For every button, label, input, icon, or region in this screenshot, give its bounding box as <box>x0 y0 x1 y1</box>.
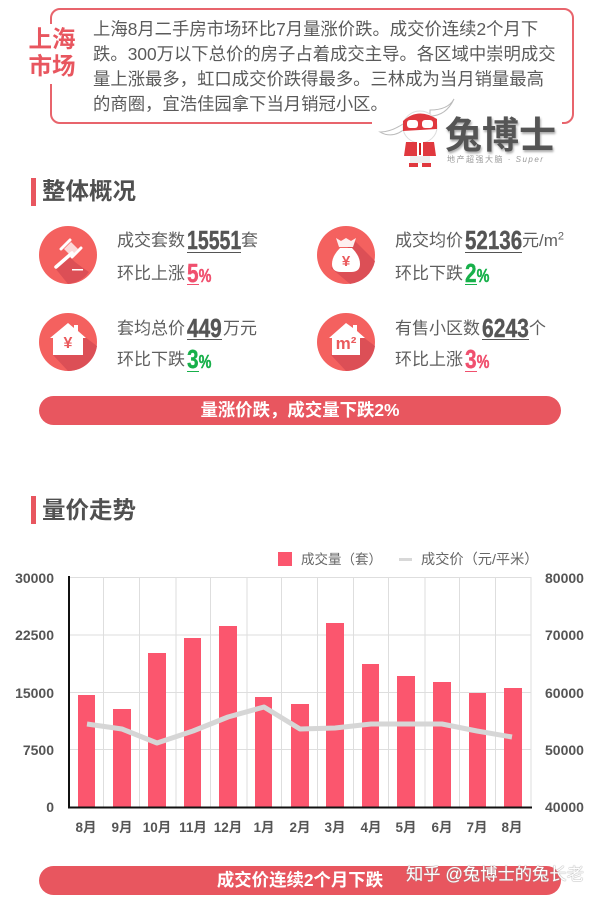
right axis labels: 40000 <box>545 799 584 815</box>
chart: volume bars and price line <box>15 551 584 835</box>
summary text: 量上涨最多，虹口成交价跌得最多。三林成为当月销量最高 <box>93 69 544 89</box>
icon: house with yen: ¥ <box>64 335 73 352</box>
stat: communities on sale: 3% <box>465 344 489 374</box>
month labels: 11月 <box>179 820 207 835</box>
change text: 环比下跌 <box>117 350 185 369</box>
logo wordmark: 兔博士 <box>445 115 556 156</box>
market heading: 上海 <box>28 26 76 52</box>
stat: deal count: 5% <box>187 258 211 288</box>
stat: average price: 2% <box>465 258 489 288</box>
heading text: 整体概况 <box>42 178 136 204</box>
change text: 环比上涨 <box>395 350 463 369</box>
right axis labels <box>545 570 584 815</box>
axes <box>69 576 532 808</box>
stat: average price <box>317 225 564 288</box>
stat underline <box>482 339 529 340</box>
summary text: 上海8月二手房市场环比7月量涨价跌。成交价连续2个月下 <box>93 19 538 39</box>
month labels: 3月 <box>324 820 346 835</box>
logo tagline: 地产超强大脑 · Super <box>447 155 544 164</box>
change text <box>117 344 212 374</box>
logo: rabbit doctor <box>372 98 562 167</box>
frame outline <box>50 8 574 124</box>
left axis labels: 22500 <box>15 627 54 643</box>
icon: gavel <box>39 226 97 284</box>
stat: communities on sale: 个 <box>529 319 546 338</box>
stat: average price: 元/m2 <box>522 230 564 250</box>
month labels: 2月 <box>289 820 311 835</box>
summary text <box>93 19 556 114</box>
stat: average price: 52136 <box>465 225 522 255</box>
icon: rabbit mascot <box>378 98 454 167</box>
bars: monthly volume <box>78 623 522 807</box>
stat: average total price: 449 <box>187 313 222 343</box>
legend label: volume: 成交量（套） <box>301 551 382 567</box>
change text: 环比下跌 <box>395 264 463 283</box>
icon: house with square metres: m² <box>336 334 357 353</box>
legend <box>278 551 538 568</box>
market heading: 市场 <box>28 53 76 79</box>
stat: communities on sale: 6243 <box>482 313 529 343</box>
stat text <box>117 225 258 255</box>
right axis labels: 80000 <box>545 570 584 586</box>
legend swatch: volume <box>278 552 292 566</box>
left axis labels: 15000 <box>15 685 54 701</box>
stat underline <box>187 339 222 340</box>
legend label: price: 成交价（元/平米） <box>421 551 538 568</box>
heading accent bar <box>31 496 36 524</box>
month labels: 9月 <box>111 820 133 835</box>
right axis labels: 60000 <box>545 685 584 701</box>
month labels: 10月 <box>143 820 171 835</box>
month labels <box>75 820 523 835</box>
banner: trend conclusion <box>39 866 561 895</box>
line: monthly price <box>87 707 512 743</box>
stat text: 套均总价 <box>117 319 185 338</box>
banner: overview conclusion: 量涨价跌，成交量下跌2% <box>200 400 400 420</box>
left axis labels: 0 <box>46 799 54 815</box>
banner: trend conclusion: 成交价连续2个月下跌 <box>217 870 383 890</box>
stat: deal count: 套 <box>241 231 258 250</box>
stat text <box>117 313 257 343</box>
heading: volume and price trend <box>31 496 136 524</box>
stat text: 成交套数 <box>117 231 185 250</box>
month labels: 8月 <box>501 820 523 835</box>
left axis labels: 30000 <box>15 570 54 586</box>
stat text: 成交均价 <box>395 231 463 250</box>
left axis labels: 7500 <box>23 742 54 758</box>
icon: house with yen <box>39 313 97 371</box>
month labels: 8月 <box>75 820 97 835</box>
icon: money bag <box>317 226 375 284</box>
stat underline <box>187 252 241 253</box>
change text: 环比上涨 <box>117 264 185 283</box>
stat: average total price: 3% <box>187 344 211 374</box>
watermark: 知乎 @兔博士的兔长老 <box>406 864 584 884</box>
legend swatch: price <box>399 558 412 561</box>
month labels: 5月 <box>395 820 417 835</box>
stat: average total price: 万元 <box>223 319 257 338</box>
stat: deal count: 15551 <box>187 225 241 255</box>
logo white backing <box>372 115 562 170</box>
panel: Shanghai market summary <box>28 8 574 124</box>
change underline <box>465 371 477 372</box>
summary text: 跌。300万以下总价的房子占着成交主导。各区域中崇明成交 <box>93 44 556 64</box>
stat: deal count <box>39 225 258 288</box>
right axis labels: 70000 <box>545 627 584 643</box>
month labels: 6月 <box>431 820 453 835</box>
stat text <box>395 313 546 343</box>
stat text: 有售小区数 <box>395 319 480 338</box>
change underline <box>465 284 477 285</box>
change text <box>395 344 490 374</box>
change text <box>117 258 212 288</box>
change underline <box>187 371 199 372</box>
month labels: 7月 <box>466 820 488 835</box>
right axis labels: 50000 <box>545 742 584 758</box>
heading: overview <box>31 178 136 206</box>
summary text: 的商圈，宜浩佳园拿下当月销冠小区。 <box>93 94 388 114</box>
icon: money bag: ¥ <box>342 253 351 270</box>
month labels: 1月 <box>253 820 275 835</box>
stat text <box>395 225 564 255</box>
icon: house with square metres <box>317 313 375 371</box>
heading accent bar <box>31 178 36 206</box>
stat underline <box>465 252 522 253</box>
banner: overview conclusion <box>39 396 561 425</box>
stat: average total price <box>39 313 257 374</box>
heading text: 量价走势 <box>42 497 136 523</box>
month labels: 12月 <box>214 820 242 835</box>
left axis labels <box>15 570 54 815</box>
market heading <box>24 24 80 84</box>
month labels: 4月 <box>360 820 382 835</box>
change text <box>395 258 490 288</box>
change underline <box>187 284 199 285</box>
stat: communities on sale <box>317 313 546 374</box>
